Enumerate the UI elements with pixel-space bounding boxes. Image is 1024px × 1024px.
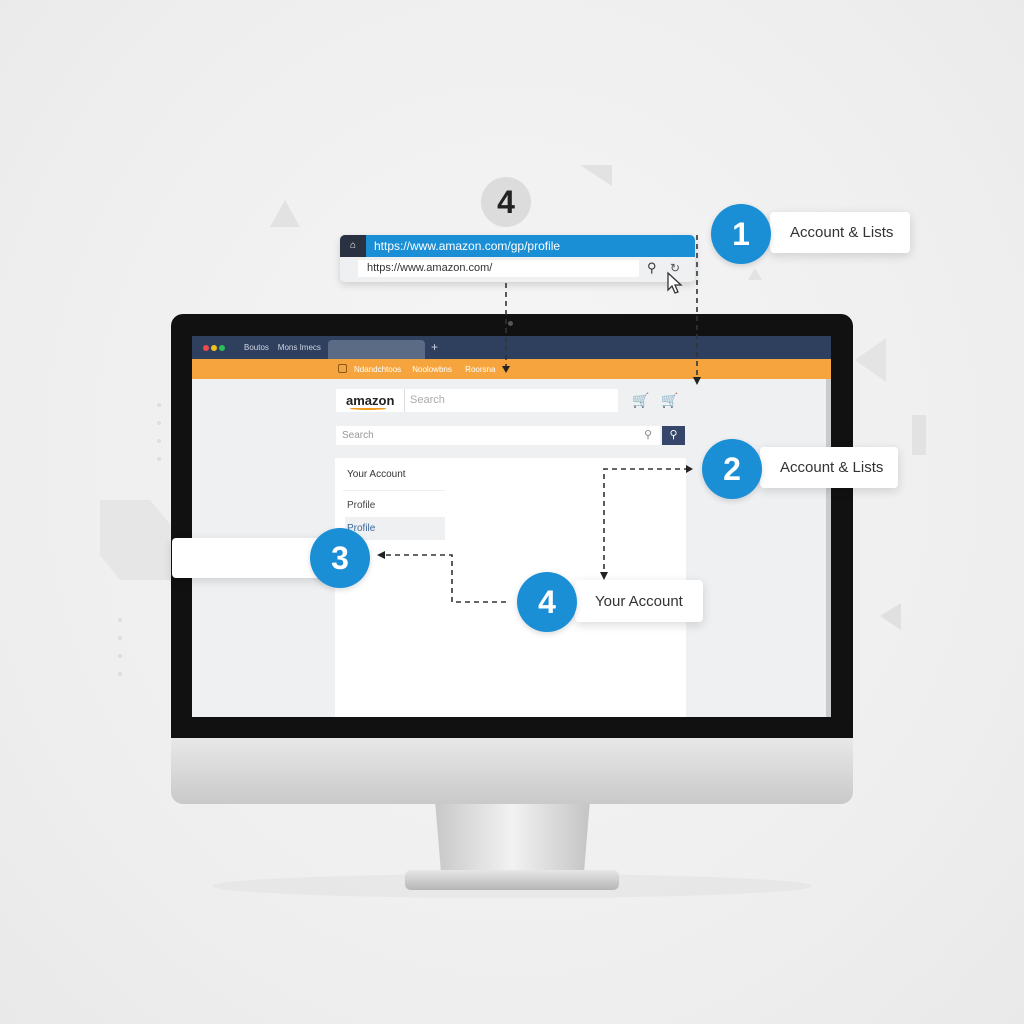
monitor stand	[435, 804, 590, 870]
top step 4 gray circle: 4	[497, 184, 515, 220]
top step 4 gray circle	[481, 177, 531, 227]
search bar: ⚲	[644, 429, 652, 441]
callout 2: 2	[723, 450, 741, 486]
callout 4: Your Account	[595, 592, 683, 610]
search bar: Search	[342, 430, 374, 441]
account panel: Your Account	[347, 469, 406, 480]
callout 2	[700, 439, 902, 503]
account panel	[335, 458, 686, 718]
callout 1	[709, 204, 914, 268]
URL bar popup	[340, 235, 695, 282]
callout 1: 1	[732, 216, 750, 252]
browser titlebar: +	[431, 340, 438, 354]
search bar	[336, 426, 660, 445]
stand base	[405, 870, 619, 890]
account panel: Profile	[347, 523, 375, 534]
account panel: Profile	[347, 500, 375, 511]
URL bar popup: https://www.amazon.com/gp/profile	[374, 239, 560, 253]
URL bar popup: https://www.amazon.com/	[367, 262, 492, 274]
URL bar popup: ⚲	[647, 260, 657, 275]
callout 3	[168, 528, 372, 592]
URL bar popup: ↻	[670, 261, 680, 275]
callout 2: Account & Lists	[780, 459, 883, 476]
monitor bezel	[171, 314, 853, 744]
cart icons: 🛒 🛒	[632, 392, 679, 408]
screen: ⚲	[669, 429, 678, 441]
browser titlebar	[192, 336, 831, 359]
orange nav bar: Ndandchtoos Noolowbns Roorsna	[354, 365, 495, 374]
callout 4	[515, 572, 706, 636]
amazon header: Search	[410, 394, 445, 406]
cursor	[667, 272, 683, 294]
amazon header	[336, 389, 618, 412]
callout 3: 3	[331, 540, 349, 576]
browser titlebar: Boutos Mons Imecs	[244, 343, 321, 352]
camera	[508, 321, 513, 326]
URL bar popup: ⌂	[350, 240, 356, 251]
callout 1: Account & Lists	[790, 224, 893, 241]
amazon header: amazon	[346, 393, 394, 408]
screen	[192, 336, 831, 717]
callout 4: 4	[538, 584, 556, 620]
orange nav bar	[192, 359, 831, 379]
monitor chin	[171, 738, 853, 804]
